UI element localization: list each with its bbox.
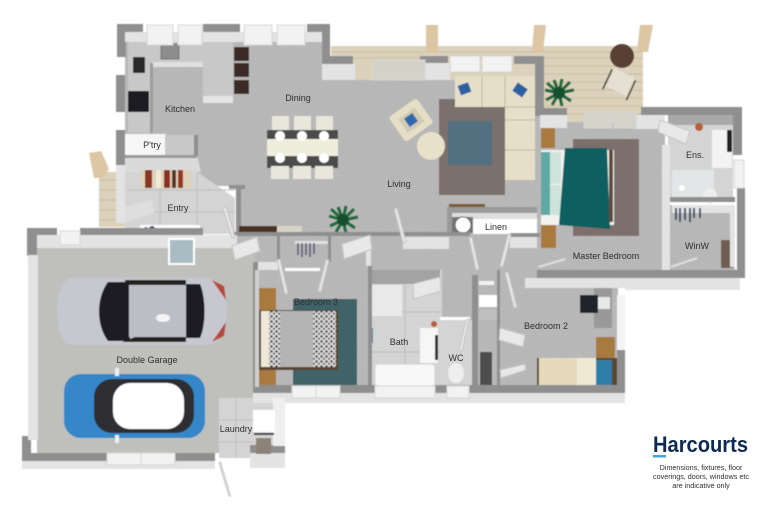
striped entry rug (141, 170, 191, 188)
room labels: WinW (685, 241, 709, 251)
doors (219, 120, 698, 496)
bedroom 3 furniture (258, 288, 357, 386)
hall shelf (239, 226, 328, 257)
bathroom fixtures (369, 285, 464, 386)
bar stools (234, 47, 249, 94)
disclaimer (653, 463, 749, 490)
corner sofa (455, 76, 535, 180)
coffee machine (133, 57, 145, 73)
master bedroom rug (573, 139, 639, 236)
ensuite fixtures (672, 123, 732, 204)
Harcourts logo: Harcourts (653, 432, 748, 457)
patio deck (331, 25, 653, 126)
inner faces of walls (light) (22, 32, 740, 469)
potted plant: patio (545, 79, 574, 106)
walk-in wardrobe rails (672, 205, 733, 268)
armchair (388, 98, 434, 142)
room labels: Entry (167, 203, 189, 213)
room labels: Master Bedroom (573, 251, 639, 261)
windows (60, 25, 744, 465)
room labels: P'try (143, 140, 161, 150)
potted plant: living (329, 206, 358, 233)
room labels: Kitchen (165, 104, 195, 114)
entry steps (89, 151, 125, 227)
pantry block (123, 134, 201, 172)
linen cupboard (447, 204, 537, 234)
living rug (439, 99, 505, 195)
kitchen counters (128, 42, 249, 133)
room labels: Dining (285, 93, 311, 103)
silver car (57, 278, 227, 345)
cooktop (128, 91, 149, 112)
room labels: Living (387, 179, 411, 189)
room labels: Bedroom 3 (294, 297, 338, 307)
room labels (116, 93, 709, 434)
room labels: Ens. (686, 150, 704, 160)
sink (161, 44, 179, 59)
laundry appliance (253, 410, 275, 454)
disclaimer: coverings, doors, windows etc (653, 472, 749, 481)
disclaimer: are indicative only (672, 481, 730, 490)
tiled floors (125, 115, 733, 458)
carpet floors (125, 40, 735, 387)
dining table with chairs (267, 116, 338, 179)
entry door and shelf (122, 199, 200, 233)
room labels: Double Garage (116, 355, 178, 365)
master bedroom furniture (541, 126, 614, 248)
linen closet bay (479, 270, 500, 385)
disclaimer: Dimensions, fixtures, floor (660, 463, 743, 472)
room labels: Bath (390, 337, 408, 347)
room labels: Linen (485, 222, 507, 232)
room labels: Bedroom 2 (524, 321, 568, 331)
room labels: Laundry (220, 424, 253, 434)
blue car (64, 368, 205, 443)
patio table and chair (603, 44, 636, 100)
bedroom 2 furniture (537, 280, 617, 385)
garage floor (37, 248, 255, 453)
round coffee table (417, 132, 445, 160)
room labels: WC (448, 353, 464, 363)
